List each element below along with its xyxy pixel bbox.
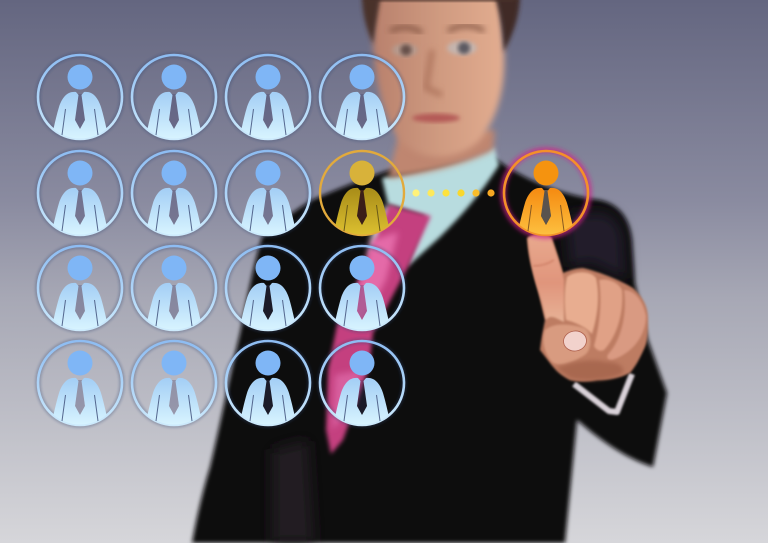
- person icon r1 c1: [38, 55, 122, 143]
- middle finger: [565, 272, 598, 334]
- person icon r4 c1: [38, 341, 122, 429]
- person icon r1 c2: [132, 55, 216, 143]
- hair right: [494, 0, 520, 52]
- thumb: [543, 324, 590, 364]
- left eye: [392, 44, 418, 56]
- person icon r1 c3: [226, 55, 310, 143]
- shirt left of tie: [368, 205, 396, 262]
- yellow source icon: [320, 151, 404, 239]
- thumbnail: [562, 329, 588, 353]
- shirt cuff: [574, 374, 632, 412]
- hair left: [362, 0, 381, 44]
- ring finger: [594, 279, 622, 351]
- dotted connector: [412, 189, 495, 197]
- person icon r2 c1: [38, 151, 122, 239]
- hair top: [365, 0, 515, 1]
- hand pointing: [527, 234, 648, 382]
- shirt: [382, 147, 499, 267]
- eyebrows: [390, 26, 484, 33]
- little finger: [607, 290, 646, 360]
- person icon r2 c2: [132, 151, 216, 239]
- row 2 icons: [38, 151, 310, 239]
- index finger: [528, 235, 564, 322]
- finger crease: [533, 260, 554, 266]
- person icon r4 c3: [226, 341, 310, 429]
- palm shadow: [556, 360, 623, 380]
- nose shadow: [426, 50, 442, 95]
- row 4 icons: [38, 341, 404, 429]
- mouth: [412, 114, 460, 122]
- lapel sheen: [272, 440, 314, 543]
- man in suit, out of focus: [192, 0, 667, 543]
- neck: [388, 130, 495, 178]
- person icon r3 c1: [38, 246, 122, 334]
- person icon r4 c4: [320, 341, 404, 429]
- orange selected icon: [503, 150, 589, 239]
- person icon r2 c3: [226, 151, 310, 239]
- tie highlight: [350, 232, 398, 325]
- lower tie highlight: [332, 370, 362, 430]
- person icon r3 c2: [132, 246, 216, 334]
- fist base: [527, 234, 648, 382]
- icon grid: [38, 55, 404, 429]
- person icon r1 c4: [320, 55, 404, 143]
- row 3 icons: [38, 246, 404, 334]
- person icon r3 c4: [320, 246, 404, 334]
- person icon r3 c3: [226, 246, 310, 334]
- person icon r4 c2: [132, 341, 216, 429]
- right eye: [447, 41, 477, 55]
- row 1 icons: [38, 55, 404, 143]
- head: [372, 0, 504, 157]
- pink necktie: [326, 205, 431, 454]
- sleeve sheen: [565, 212, 626, 280]
- jacket: [192, 158, 667, 543]
